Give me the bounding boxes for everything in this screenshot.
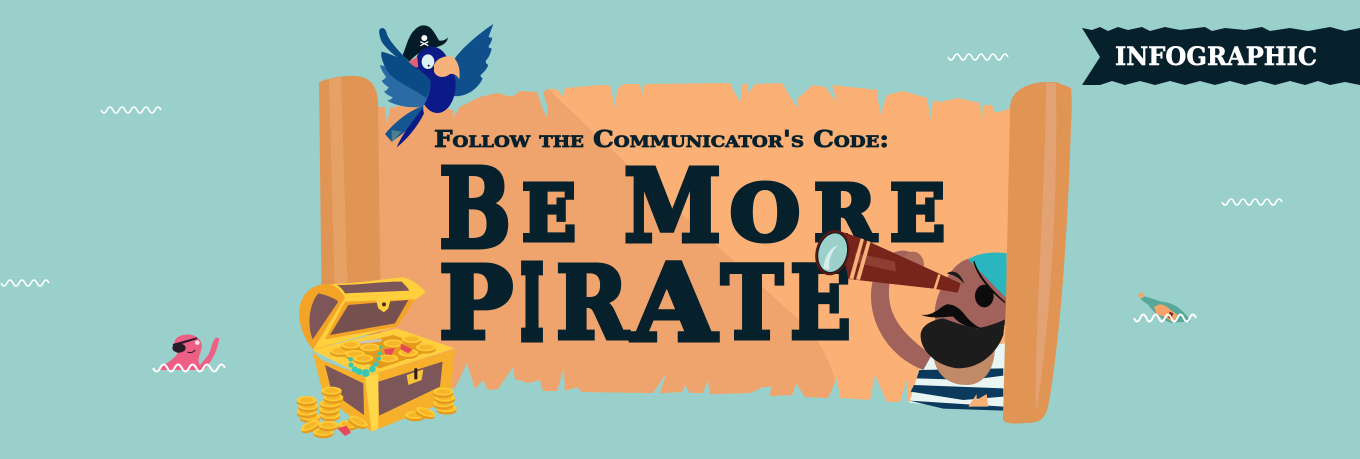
eye patch <box>973 261 1005 307</box>
headline line 1: Be More: B <box>439 144 511 273</box>
parchment sheet <box>370 80 1020 410</box>
right scroll roll <box>1003 82 1072 424</box>
face <box>935 257 1007 353</box>
illustration: treasure chest <box>297 277 457 438</box>
headline line 1: Be More: R <box>814 169 877 259</box>
coin stacks <box>297 387 457 438</box>
illustration: pirate with telescope <box>810 226 1007 411</box>
chest box <box>312 349 455 432</box>
octopus body <box>157 335 219 370</box>
headline line 1: Be More: O <box>730 169 800 259</box>
bottle cork <box>1138 293 1144 298</box>
banner: infographic ribbon <box>1082 27 1360 85</box>
head <box>415 47 448 83</box>
shirt <box>909 343 1005 411</box>
hand <box>902 252 924 278</box>
headline line 1: Be More: M <box>624 147 721 265</box>
scroll band <box>1168 312 1173 319</box>
arm <box>871 251 932 370</box>
eye <box>422 54 434 69</box>
right wing <box>453 24 493 96</box>
headline line 2: Pirate: E <box>790 244 851 362</box>
ribbon label: INFOGRAPHIC <box>1115 42 1317 71</box>
illustration: parrot with pirate hat <box>379 24 493 147</box>
headline line 2: Pirate: A <box>631 240 718 365</box>
wave: top centre right <box>948 54 1008 60</box>
moustache <box>921 304 982 328</box>
bottle glass <box>1141 296 1191 323</box>
wave: far left <box>1 280 49 286</box>
eyebrow <box>947 272 964 284</box>
neck <box>933 347 995 385</box>
headline line 2: Pirate: P <box>439 244 513 362</box>
beak <box>434 56 460 79</box>
body <box>419 57 456 113</box>
chest treasure pile <box>312 328 455 377</box>
headline line 1: Be More: E <box>522 169 576 259</box>
telescope <box>810 226 961 293</box>
message scroll <box>1154 304 1177 323</box>
bandana <box>409 57 418 67</box>
illustration: octopus with eye patch <box>157 335 219 370</box>
headline line 2: Pirate: T <box>721 244 783 362</box>
panel: parchment scroll <box>319 76 1020 410</box>
bandana <box>968 252 1007 298</box>
left scroll roll <box>319 76 381 335</box>
illustration: message in a bottle <box>1138 293 1191 323</box>
pirate hat <box>403 25 448 62</box>
wave: upper left <box>101 107 161 113</box>
left wing <box>379 28 431 107</box>
chest lid <box>299 277 426 349</box>
headline line 1: Be More: E <box>890 169 945 259</box>
parrot tail <box>385 106 424 147</box>
subtitle: Follow the Communicator's Code: Follow the Communicator's Code: <box>434 126 889 153</box>
wave: under bottle <box>1134 314 1196 322</box>
headline line 2: Pirate: R <box>556 244 629 362</box>
necklace <box>348 346 382 377</box>
eye patch <box>172 337 200 353</box>
title <box>434 126 945 365</box>
wave: under octopus <box>153 364 225 372</box>
wave: right <box>1222 199 1282 205</box>
headline line 2: Pirate: I <box>521 244 543 362</box>
ribbon shape <box>1082 27 1360 85</box>
beard <box>921 318 1005 368</box>
